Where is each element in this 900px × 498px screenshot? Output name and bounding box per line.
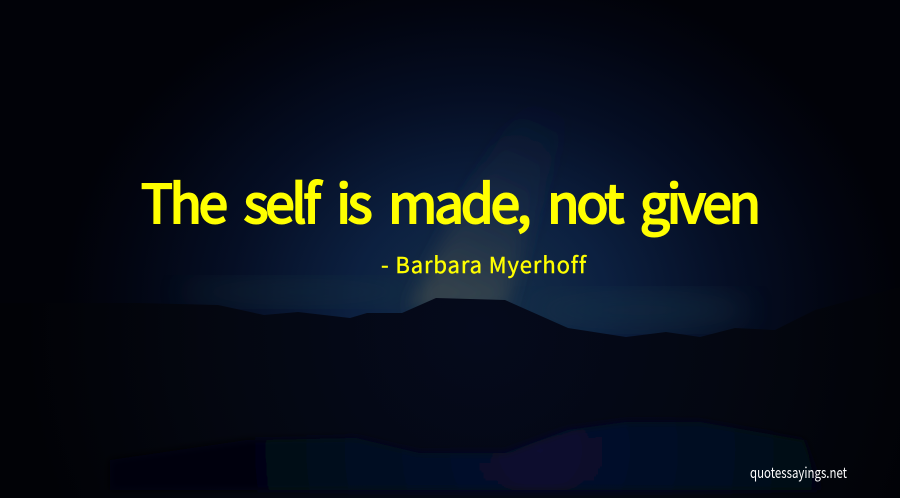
watermark: quotessayings.net — [750, 462, 847, 483]
milky way band — [180, 85, 750, 330]
mountain silhouette — [0, 287, 900, 498]
author attribution: - Barbara Myerhoff — [381, 248, 587, 280]
title quote: The self is made, not given — [141, 163, 761, 239]
lake reflection — [110, 422, 820, 490]
